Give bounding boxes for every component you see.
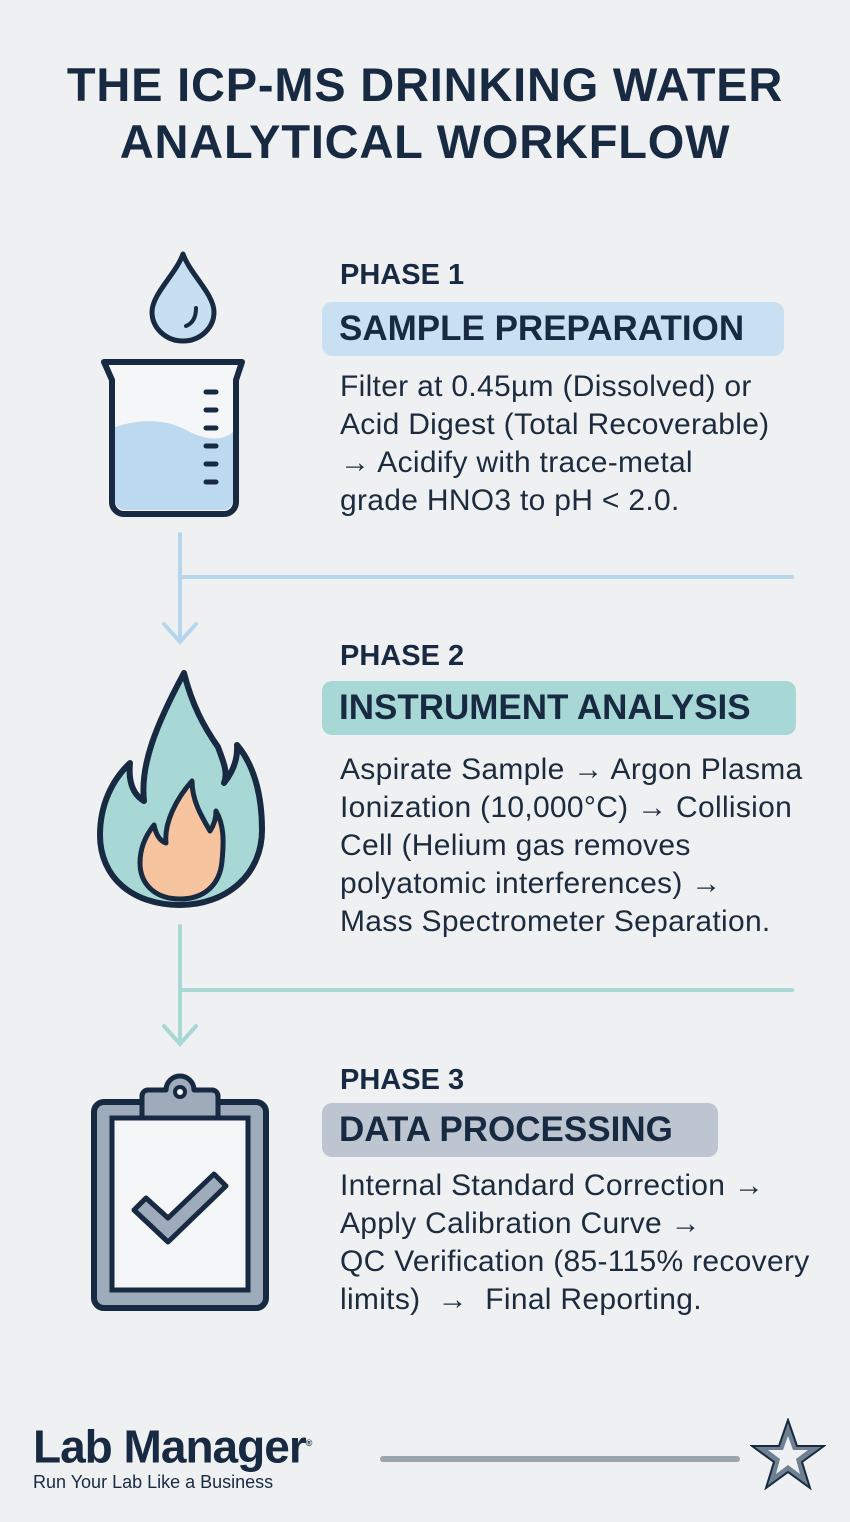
icon: star — [750, 1418, 826, 1490]
text: phase 2 description: Ionization (10,000°C) → Collision — [340, 791, 792, 824]
icon: flame — [97, 670, 265, 908]
text: phase 1 description: grade HNO3 to pH < 2.0. — [340, 484, 680, 517]
footer logo: Run Your Lab Like a Business — [33, 1472, 273, 1492]
text: phase 3 description — [340, 1169, 810, 1316]
pill: instrument analysis — [322, 681, 796, 735]
icon: water drop — [150, 252, 216, 344]
pill: data processing — [322, 1103, 718, 1157]
text: phase 2 description: Aspirate Sample → Argon Plasma — [340, 753, 803, 786]
arrow: phase 2 to 3 — [162, 924, 794, 1047]
icon: clipboard — [91, 1074, 269, 1311]
text: phase 3 description: Internal Standard Correction → — [340, 1169, 764, 1202]
text: phase 2 description: Cell (Helium gas removes — [340, 829, 691, 862]
icon: beaker — [101, 359, 245, 517]
pill: data processing: DATA PROCESSING — [339, 1110, 673, 1149]
text: phase 1 description: Acid Digest (Total Recoverable) — [340, 408, 769, 441]
pill: sample preparation: SAMPLE PREPARATION — [339, 309, 744, 348]
text: phase 3 description: limits) → Final Reporting. — [340, 1283, 702, 1316]
text: phase 2 description: polyatomic interferences) → — [340, 867, 722, 900]
text: phase 1 description: Filter at 0.45µm (Dissolved) or — [340, 370, 752, 403]
phase 3 label: PHASE 3 — [340, 1064, 464, 1096]
text: phase 1 description — [340, 370, 769, 517]
text: phase 3 description: Apply Calibration Curve → — [340, 1207, 701, 1240]
title — [67, 58, 783, 168]
footer line — [380, 1456, 740, 1462]
phase 2 label: PHASE 2 — [340, 640, 464, 672]
text: phase 2 description — [340, 753, 803, 938]
text: phase 1 description: → Acidify with trace-metal — [340, 446, 693, 479]
text: phase 3 description: QC Verification (85-115% recovery — [340, 1245, 810, 1278]
title: ANALYTICAL WORKFLOW — [120, 115, 730, 168]
phase 1 label: PHASE 1 — [340, 259, 464, 291]
title: THE ICP-MS DRINKING WATER — [67, 58, 783, 111]
footer logo: Lab Manager® — [33, 1420, 311, 1472]
pill: sample preparation — [322, 302, 784, 356]
text: phase 2 description: Mass Spectrometer Separation. — [340, 905, 771, 938]
arrow: phase 1 to 2 — [162, 532, 794, 645]
pill: instrument analysis: INSTRUMENT ANALYSIS — [339, 688, 751, 727]
